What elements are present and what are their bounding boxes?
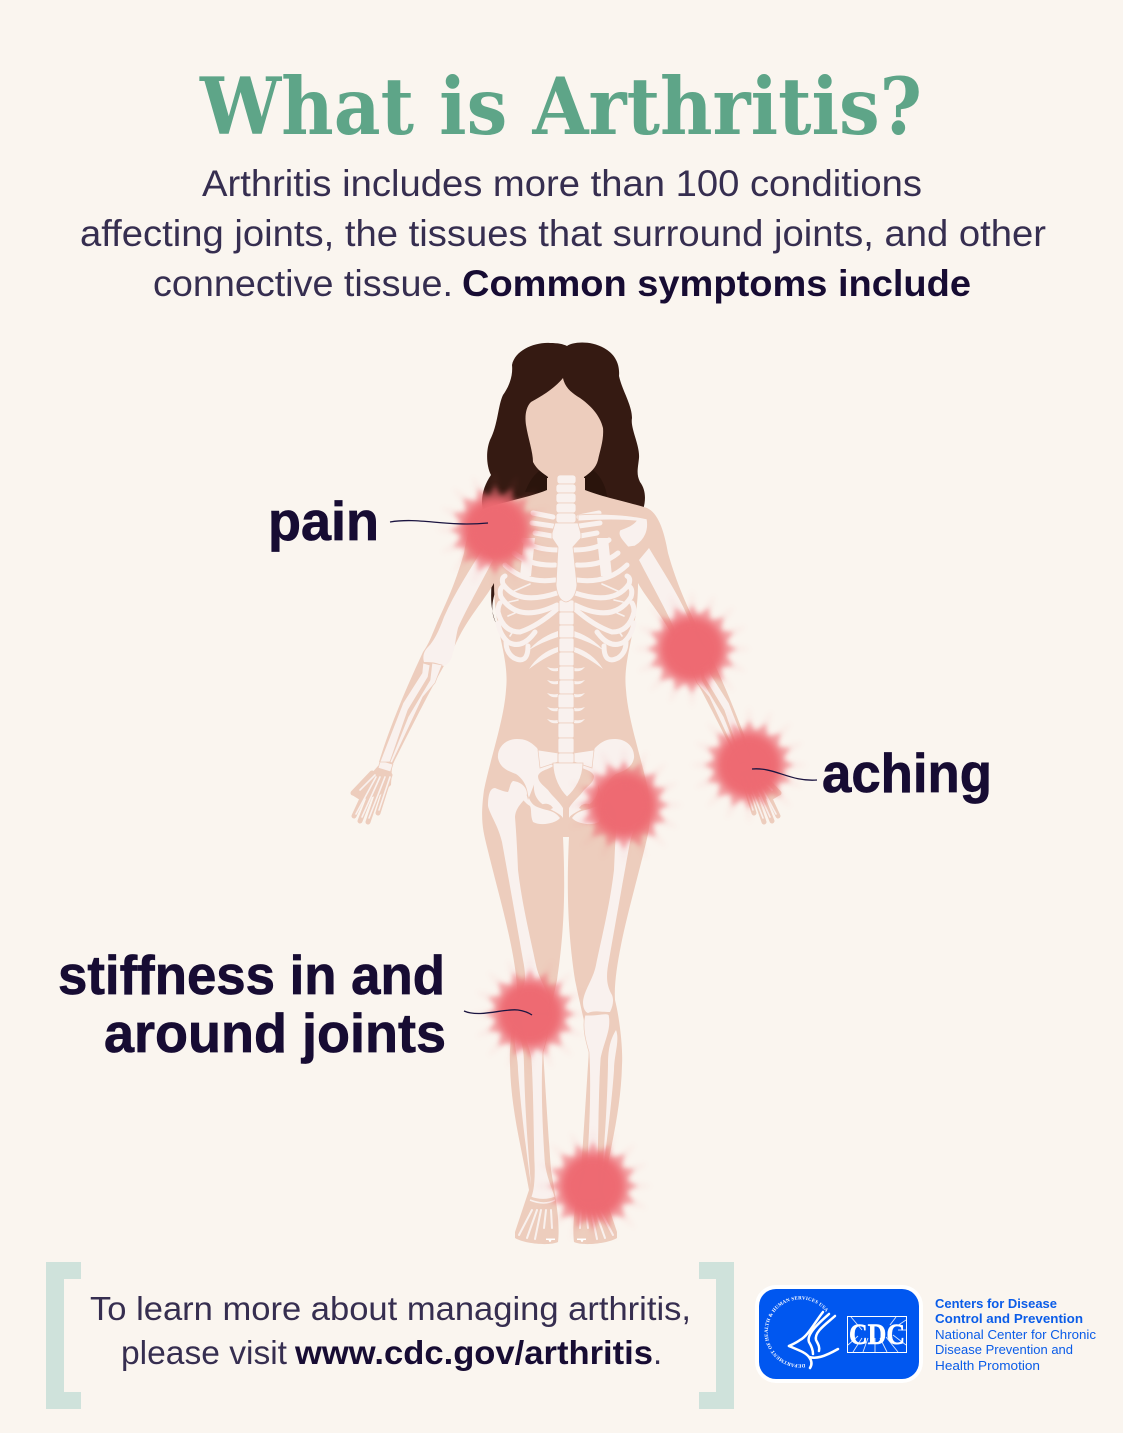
- left bracket: [46, 1262, 81, 1409]
- CDC box: [848, 1316, 906, 1352]
- illustration: woman with skeleton: [352, 342, 780, 1244]
- intro text: [80, 163, 1046, 304]
- leader line: pain: [390, 521, 488, 524]
- CDC organization text: National Center for Chronic: [935, 1327, 1097, 1342]
- leader line: aching: [752, 769, 817, 780]
- label: pain: pain: [268, 490, 379, 552]
- joint glow: wrist: [689, 705, 809, 825]
- CDC logo: [755, 1285, 923, 1383]
- CDC letters: CDC: [849, 1318, 905, 1351]
- CDC box rays: [848, 1317, 906, 1352]
- CDC logo: DEPARTMENT OF HEALTH & HUMAN SERVICES USA: [764, 1296, 828, 1368]
- joint glow: knee: [470, 954, 590, 1074]
- call to action text: To learn more about managing arthritis,: [90, 1290, 691, 1327]
- leader line: stiffness: [464, 1010, 532, 1015]
- CDC organization text: Health Promotion: [935, 1358, 1040, 1373]
- head: [526, 378, 603, 492]
- joint glow: shoulder: [435, 470, 555, 590]
- intro text: Arthritis includes more than 100 conditions: [202, 163, 922, 204]
- CDC organization text: Disease Prevention and: [935, 1342, 1073, 1357]
- right bracket: [699, 1262, 734, 1409]
- hair: [482, 342, 645, 623]
- joint glow: hip: [564, 745, 684, 865]
- label: stiffness in and around joints: stiffness in and: [58, 944, 445, 1006]
- title: What is Arthritis?: [199, 60, 922, 153]
- spine and sternum: [552, 475, 583, 797]
- label: stiffness in and around joints: [58, 944, 446, 1064]
- CDC organization text: Centers for Disease: [935, 1296, 1057, 1311]
- HHS seal ring text: [768, 1299, 826, 1364]
- intro text: Common symptoms include: [462, 263, 971, 304]
- joint glow: ankle: [533, 1126, 653, 1246]
- joint glow: elbow: [632, 589, 752, 709]
- HHS eagle: [789, 1312, 838, 1368]
- call to action text: www.cdc.gov/arthritis: [294, 1334, 653, 1371]
- CDC organization text: [935, 1296, 1097, 1373]
- CDC organization text: Control and Prevention: [935, 1311, 1083, 1326]
- intro text: connective tissue.: [153, 263, 453, 304]
- label: stiffness in and around joints: around joints: [104, 1002, 446, 1064]
- left half of body and skeleton: [352, 478, 566, 1244]
- call to action text: please visit: [121, 1334, 287, 1371]
- call to action text: .: [653, 1334, 662, 1371]
- intro text: affecting joints, the tissues that surround joints, and other: [80, 213, 1046, 254]
- label: aching: aching: [822, 742, 992, 804]
- hair shadow: [525, 468, 607, 497]
- right half of body and skeleton: [566, 478, 780, 1244]
- call to action text: [90, 1290, 691, 1371]
- right shoulder blade and clavicle: [578, 514, 648, 547]
